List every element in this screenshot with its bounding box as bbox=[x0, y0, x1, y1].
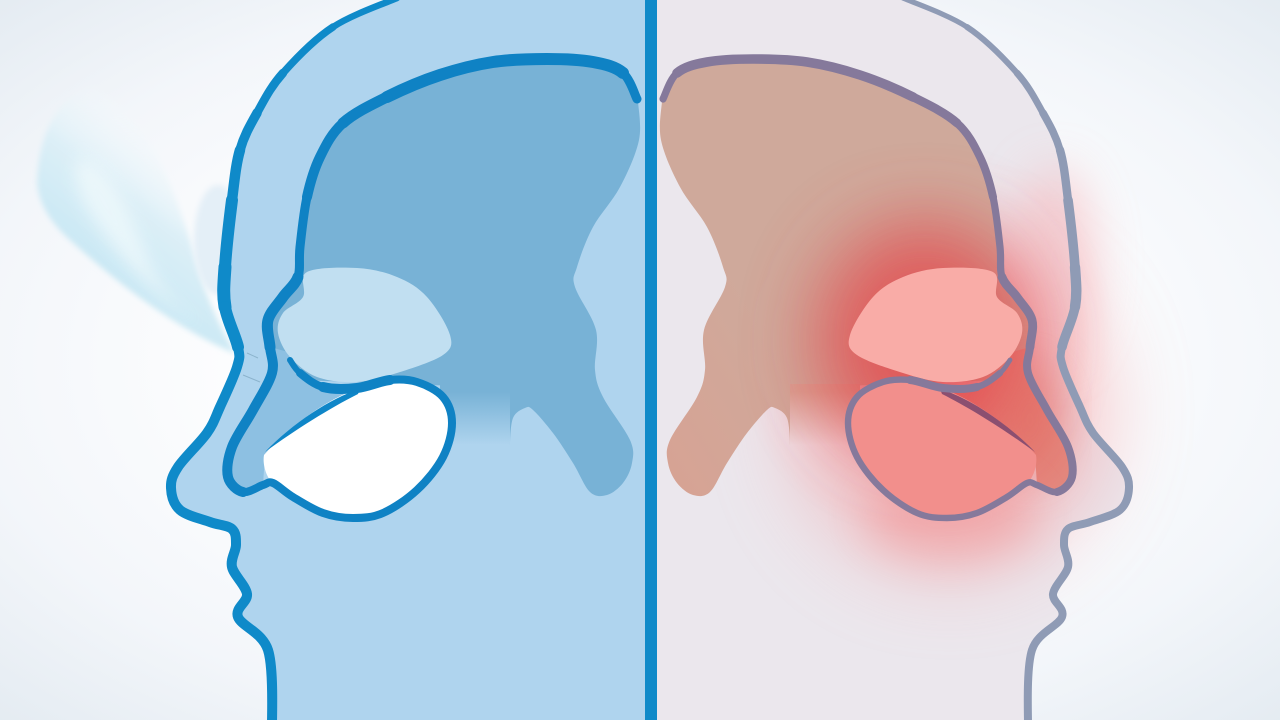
upper sinus bbox=[278, 268, 451, 382]
nasal passage bbox=[227, 347, 357, 492]
lower sinus upper edge bbox=[940, 389, 1035, 452]
central divider line bbox=[645, 0, 657, 720]
cavity fade bbox=[440, 384, 510, 445]
red inflammation core bbox=[817, 222, 1058, 557]
lower sinus upper edge bbox=[265, 389, 360, 452]
lower clear sinus bbox=[264, 379, 452, 518]
sinus cavity fill bbox=[268, 59, 640, 496]
head outline bbox=[171, 0, 397, 720]
lower inflamed sinus bbox=[848, 379, 1036, 518]
cavity outline bbox=[227, 59, 637, 518]
upper inflamed sinus bbox=[849, 268, 1022, 382]
cavity outline bbox=[663, 59, 1073, 518]
cavity fade bbox=[790, 384, 860, 445]
airflow swirl entering the nose bbox=[37, 85, 242, 354]
head outline bbox=[903, 0, 1129, 720]
nasal passage bbox=[943, 347, 1073, 492]
outer inflammation glow bbox=[790, 165, 1110, 575]
sinus cavity fill bbox=[660, 59, 1032, 496]
panel: healthy left head bbox=[171, 0, 648, 720]
head silhouette bbox=[652, 0, 1129, 720]
panel: inflamed right head bbox=[652, 0, 1129, 720]
head silhouette bbox=[171, 0, 648, 720]
nostril hairlines bbox=[243, 353, 260, 382]
